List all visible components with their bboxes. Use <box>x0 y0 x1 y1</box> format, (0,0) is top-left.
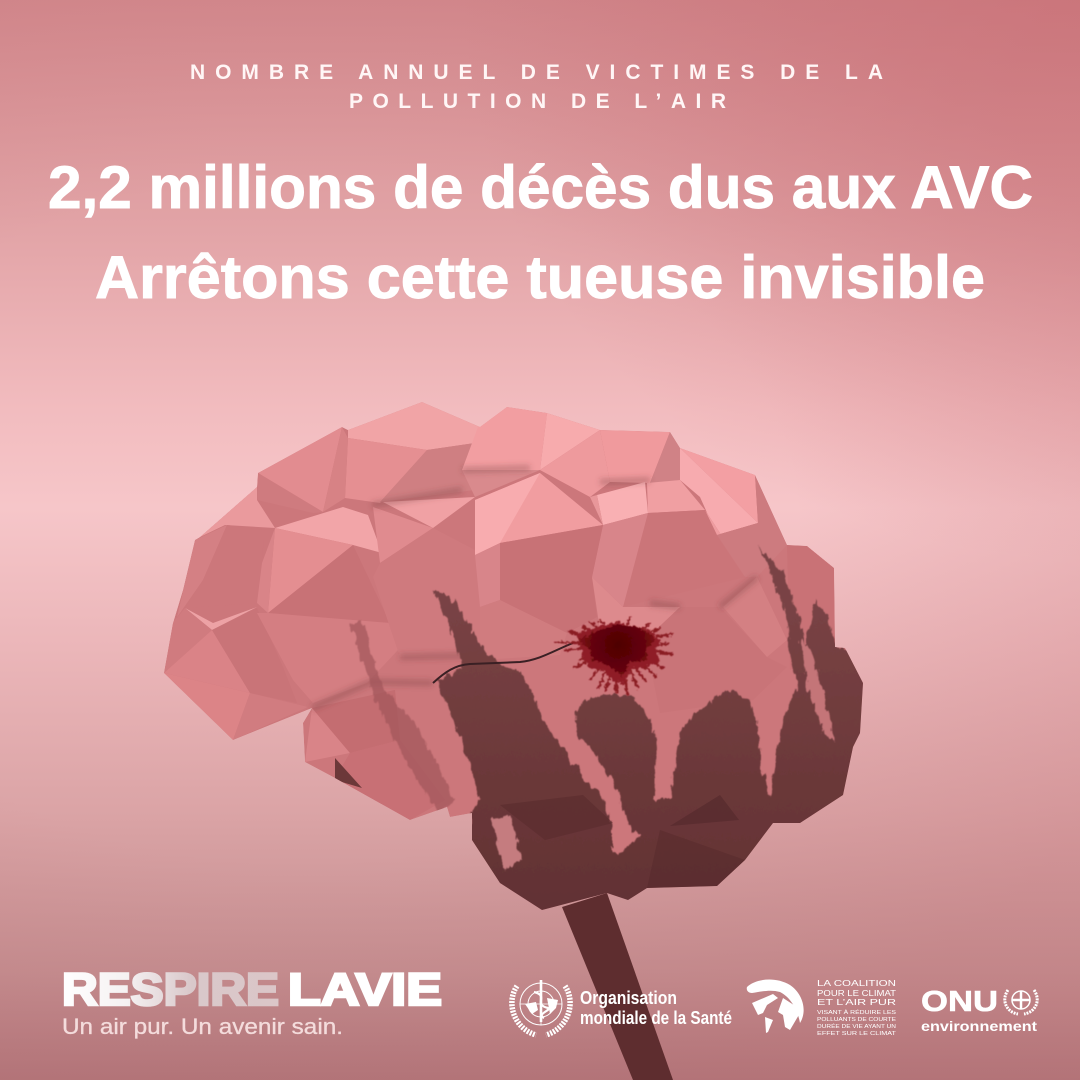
logo text: La Coalition: LA COALITION <box>817 978 896 988</box>
facets: top centre and right lobes <box>462 407 835 656</box>
logo text: La Coalition: VISANT À RÉDUIRE LES <box>817 1009 896 1016</box>
crack <box>433 643 573 683</box>
logo text: La Coalition: DURÉE DE VIE AYANT UN <box>817 1023 896 1030</box>
pink streak: right side <box>800 640 835 742</box>
icon: brain stem <box>562 893 673 1080</box>
heading: subtitle: NOMBRE ANNUEL DE VICTIMES DE LA <box>190 61 883 84</box>
logo text: Organisation mondiale de la Santé: Organisation <box>580 988 677 1008</box>
heading: main title <box>48 154 1033 311</box>
heading: subtitle <box>190 61 883 113</box>
logo: RESPIRE LA VIE <box>62 964 442 1039</box>
logo: WHO emblem <box>512 980 570 1035</box>
pink streak: lower-left wisp <box>490 815 522 870</box>
heading: main title: Arrêtons cette tueuse invisible <box>95 244 985 311</box>
heading: subtitle: POLLUTION DE L’AIR <box>349 90 726 113</box>
facets: upper-left lobes <box>164 402 483 820</box>
logo text: La Coalition: POUR LE CLIMAT <box>817 988 896 998</box>
small dark wedge <box>335 758 362 788</box>
logo text: La Coalition: POLLUANTS DE COURTE <box>817 1017 896 1023</box>
illustration: low-poly brain <box>164 402 880 930</box>
dark pollution stain <box>433 545 880 930</box>
icon: UNEP emblem <box>1005 990 1037 1014</box>
mid-tone pollution streak <box>350 620 455 815</box>
logo: Climate and Clean Air Coalition globe <box>747 979 804 1033</box>
heading: main title: 2,2 millions de décès dus aux AVC <box>48 154 1033 221</box>
logo: ONU environnement: environnement <box>921 1018 1037 1034</box>
logo: RESPIRE LA VIE: LAVIE <box>288 964 442 1015</box>
logo text: La Coalition: EFFET SUR LE CLIMAT <box>817 1031 897 1037</box>
logo text: La Coalition: ET L’AIR PUR <box>817 997 896 1007</box>
logo: ONU environnement: ONU <box>921 986 998 1018</box>
logo text: La Coalition <box>817 978 897 1037</box>
dark facets: lower lobes <box>500 795 745 888</box>
logo text: Organisation mondiale de la Santé <box>580 988 732 1028</box>
blood clot <box>556 618 672 695</box>
logo: RESPIRE LA VIE: Un air pur. Un avenir sain. <box>62 1014 343 1039</box>
shading: fissures <box>312 468 757 708</box>
logo: ONU environnement <box>921 986 1037 1034</box>
logo: RESPIRE LA VIE: RESPIRE <box>62 964 279 1015</box>
logo text: Organisation mondiale de la Santé: mondiale de la Santé <box>580 1008 732 1028</box>
